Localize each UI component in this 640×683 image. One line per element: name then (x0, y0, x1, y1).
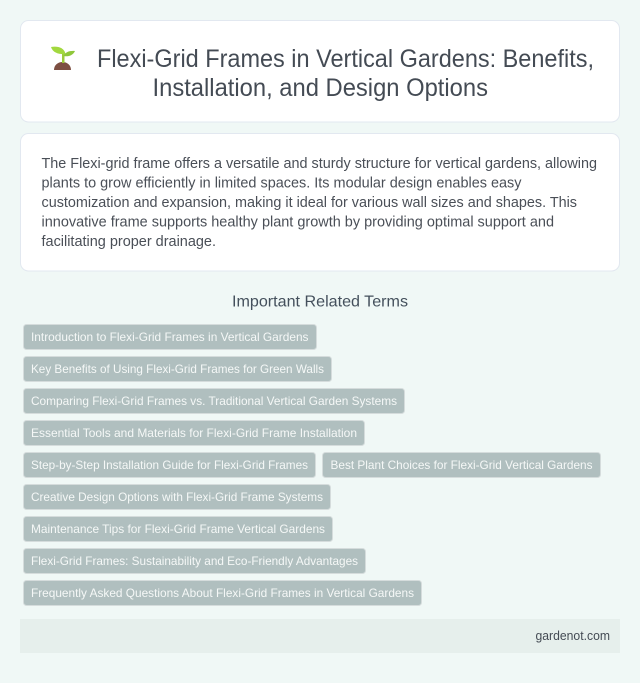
related terms tags (24, 324, 600, 606)
description text (42, 156, 597, 250)
tag: tools and materials (24, 420, 364, 446)
footer source: gardenot.com (536, 629, 610, 643)
tag: comparing: Comparing Flexi-Grid Frames vs. Traditional Vertical Garden Systems (31, 394, 397, 408)
title: Flexi-Grid Frames in Vertical Gardens: Benefits, (97, 45, 594, 73)
tag: best plants (322, 452, 600, 478)
footer (20, 619, 620, 653)
description text: The Flexi-grid frame offers a versatile and sturdy structure for vertical gardens, allowing (42, 156, 597, 172)
tag: creative design (24, 484, 330, 510)
description text: plants to grow efficiently in limited spaces. Its modular design enables easy (42, 176, 522, 192)
tag: comparing (24, 388, 404, 414)
description text: customization and expansion, making it ideal for various wall sizes and shapes. This (42, 195, 577, 211)
tag: maintenance: Maintenance Tips for Flexi-Grid Frame Vertical Gardens (31, 522, 325, 536)
description text: innovative frame supports healthy plant growth by providing optimal support and (42, 214, 554, 230)
tag: maintenance (24, 516, 332, 542)
tag: key benefits (24, 356, 332, 382)
heading: related terms: Important Related Terms (232, 294, 408, 310)
tag: creative design: Creative Design Options with Flexi-Grid Frame Systems (31, 490, 323, 504)
tag: sustainability (24, 548, 366, 574)
description text: facilitating proper drainage. (42, 234, 216, 250)
tag: introduction: Introduction to Flexi-Grid Frames in Vertical Gardens (31, 330, 308, 344)
tag: installation guide: Step-by-Step Installation Guide for Flexi-Grid Frames (31, 458, 308, 472)
title (97, 45, 594, 102)
tag: key benefits: Key Benefits of Using Flexi-Grid Frames for Green Walls (31, 362, 324, 376)
title panel (20, 20, 620, 122)
tag: tools and materials: Essential Tools and Materials for Flexi-Grid Frame Installation (31, 426, 357, 440)
tag: sustainability: Flexi-Grid Frames: Sustainability and Eco-Friendly Advantages (31, 554, 358, 568)
tag: installation guide (24, 452, 316, 478)
tag: introduction (24, 324, 316, 350)
tag: faq: Frequently Asked Questions About Flexi-Grid Frames in Vertical Gardens (31, 586, 414, 600)
title: Installation, and Design Options (152, 74, 488, 102)
panel: description (20, 134, 620, 271)
icon: sprout (51, 47, 75, 70)
tag: faq (24, 580, 422, 606)
tag: best plants: Best Plant Choices for Flexi-Grid Vertical Gardens (330, 458, 592, 472)
